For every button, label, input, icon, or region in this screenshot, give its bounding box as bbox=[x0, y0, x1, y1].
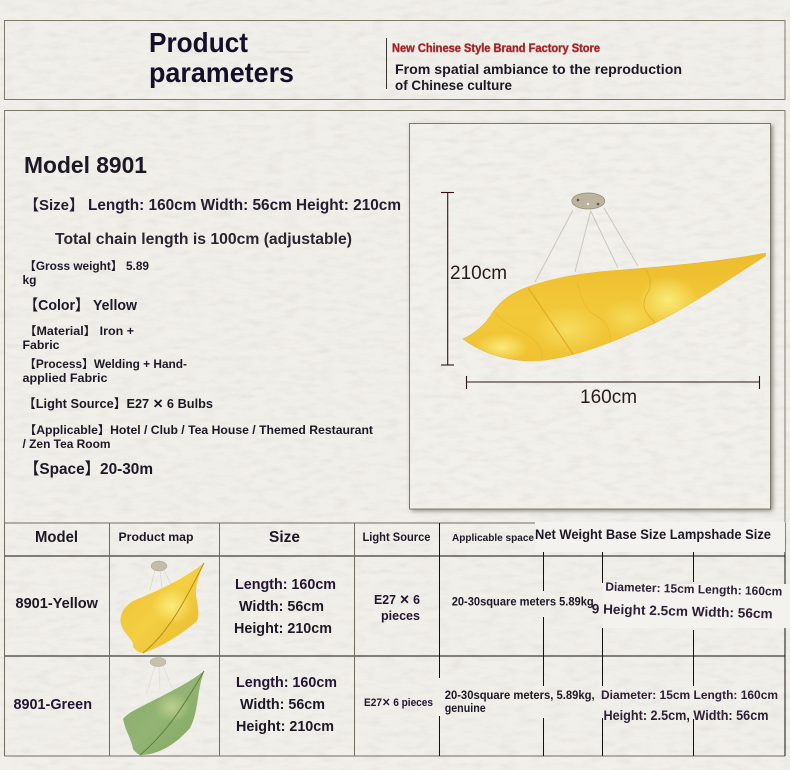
panel: specifications bbox=[4, 110, 785, 523]
table header: Product map bbox=[118, 532, 194, 544]
image: yellow leaf lamp bbox=[463, 253, 766, 361]
spec: applicable: 【Applicable】Hotel / Club / Tea House / Themed Restaurant bbox=[24, 424, 373, 437]
arrow: length dimension bbox=[466, 376, 760, 389]
spec: material bbox=[22, 325, 134, 352]
title: Product parameters: parameters bbox=[149, 57, 294, 88]
label: 210cm: 210cm bbox=[450, 263, 507, 284]
base and shade size yellow: Diameter: 15cm Length: 160cm bbox=[605, 580, 782, 599]
space and weight yellow: 20-30square meters 5.89kg bbox=[452, 597, 594, 609]
spec: space: 【Space】20-30m bbox=[24, 460, 153, 478]
size yellow: Length: 160cm bbox=[235, 576, 336, 593]
spec: size: 【Size】 bbox=[24, 197, 84, 214]
spec: gross weight: kg bbox=[22, 275, 36, 287]
space and weight green: genuine bbox=[445, 703, 486, 715]
table header: Applicable space bbox=[452, 532, 534, 544]
size green: Width: 56cm bbox=[240, 696, 325, 713]
table header: Light Source bbox=[362, 532, 430, 544]
smudge beside title bbox=[264, 51, 310, 53]
cover patch: dimensions yellow bbox=[603, 584, 790, 628]
light source yellow: E27 ✕ 6 bbox=[374, 592, 420, 607]
header tagline: of Chinese culture bbox=[395, 77, 512, 93]
spec: process: 【Process】Welding + Hand- bbox=[24, 358, 187, 371]
table grid bbox=[4, 523, 785, 756]
base and shade size green bbox=[601, 688, 778, 723]
arrow: height dimension bbox=[441, 192, 454, 365]
base and shade size yellow: 9 Height 2.5cm Width: 56cm bbox=[592, 601, 773, 621]
heading: model: Model 8901 bbox=[24, 152, 147, 178]
icon: green lamp thumbnail bbox=[123, 658, 204, 755]
table: model comparison bbox=[4, 522, 790, 756]
brand line: New Chinese Style Brand Factory Store bbox=[392, 41, 600, 55]
spec: applicable bbox=[22, 424, 373, 451]
base and shade size yellow bbox=[592, 579, 782, 622]
spec: process: applied Fabric bbox=[22, 373, 108, 385]
size green bbox=[236, 674, 337, 735]
header divider bbox=[386, 38, 387, 89]
header cover patch bbox=[535, 522, 785, 552]
model name green: 8901-Green bbox=[14, 696, 92, 713]
header tagline: From spatial ambiance to the reproduction bbox=[395, 61, 682, 77]
base and shade size green: Diameter: 15cm Length: 160cm bbox=[601, 688, 778, 702]
panel: header bbox=[4, 20, 785, 100]
spec: gross weight bbox=[22, 260, 149, 287]
spec: chain length: Total chain length is 100cm (adjustable) bbox=[55, 231, 352, 248]
space and weight green: 20-30square meters, 5.89kg, bbox=[445, 690, 595, 702]
spec: color: 【Color】 Yellow bbox=[24, 297, 137, 314]
row: green bbox=[14, 658, 778, 755]
light source yellow: pieces bbox=[381, 608, 420, 623]
spec: gross weight: 【Gross weight】 5.89 bbox=[24, 260, 149, 273]
table header: Net Weight Base Size Lampshade Size bbox=[535, 527, 771, 542]
size yellow bbox=[234, 576, 336, 637]
row: yellow bbox=[16, 561, 790, 653]
icon: yellow lamp thumbnail bbox=[120, 561, 204, 653]
space and weight green bbox=[445, 690, 595, 715]
light source yellow bbox=[374, 592, 420, 623]
table header: Model bbox=[35, 529, 78, 546]
base and shade size green: Height: 2.5cm, Width: 56cm bbox=[604, 708, 768, 723]
light source green: E27✕ 6 pieces bbox=[364, 697, 433, 709]
size yellow: Width: 56cm bbox=[239, 598, 324, 615]
model name yellow: 8901-Yellow bbox=[16, 595, 98, 612]
table header bbox=[35, 527, 771, 546]
label: 160cm: 160cm bbox=[580, 387, 637, 408]
spec: material: 【Material】 Iron + bbox=[24, 325, 134, 338]
title: Product parameters bbox=[149, 27, 294, 88]
icon: ceiling canopy and wires bbox=[535, 193, 638, 282]
size yellow: Height: 210cm bbox=[234, 620, 332, 637]
spec: process bbox=[22, 358, 187, 385]
size green: Height: 210cm bbox=[236, 718, 334, 735]
size green: Length: 160cm bbox=[236, 674, 337, 691]
header tagline bbox=[395, 61, 682, 93]
spec: light source: 【Light Source】E27 ✕ 6 Bulbs bbox=[23, 397, 213, 411]
spec: size: Length: 160cm Width: 56cm Height: 210cm bbox=[88, 197, 401, 214]
title: Product parameters: Product bbox=[149, 27, 248, 58]
table header: Size bbox=[269, 529, 300, 546]
spec: material: Fabric bbox=[22, 340, 60, 352]
spec: applicable: / Zen Tea Room bbox=[22, 439, 110, 451]
panel: product dimensions image bbox=[410, 124, 773, 511]
